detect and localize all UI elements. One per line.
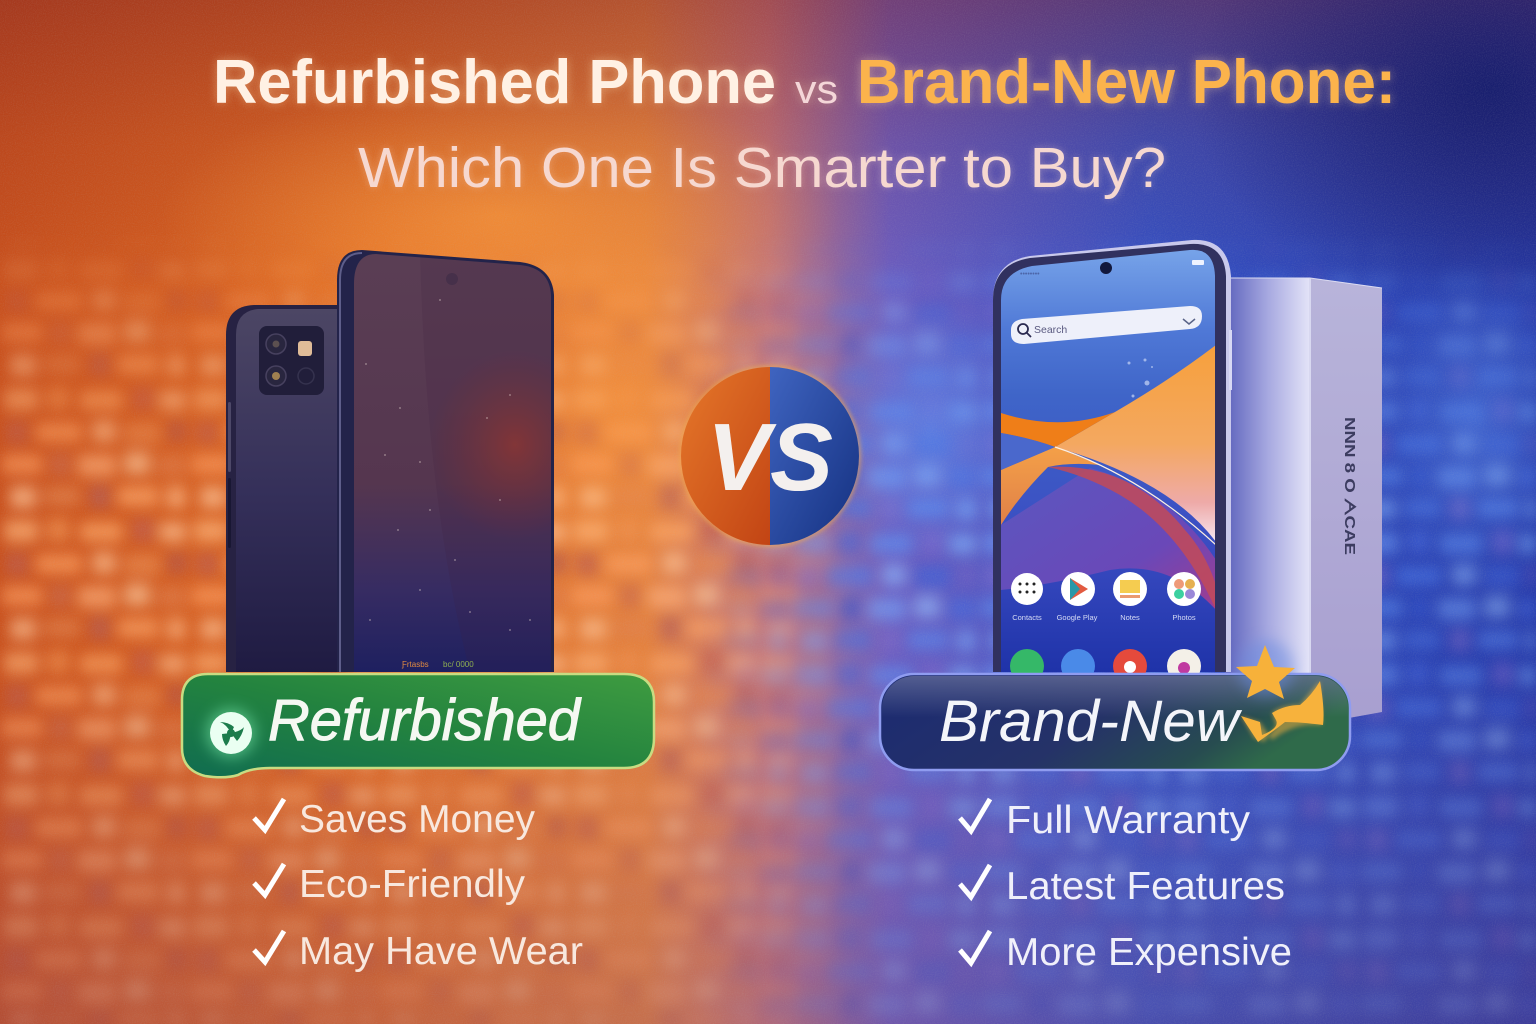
list: brand-new	[960, 799, 1292, 974]
item: May Have Wear	[299, 930, 583, 973]
refurbished phones	[226, 250, 554, 672]
camera module	[259, 326, 324, 395]
title	[213, 48, 1396, 117]
phone back with camera	[226, 305, 345, 672]
app icons: Notes	[1120, 613, 1140, 622]
status bar	[1020, 260, 1204, 274]
search bar: Search	[1034, 324, 1067, 336]
VS badge: VS	[707, 404, 833, 511]
item: Latest Features	[1006, 865, 1285, 908]
icon: star	[1236, 640, 1295, 699]
label: Brand-New	[880, 640, 1350, 770]
wallpaper left orange	[1001, 447, 1100, 525]
status bar: ••••••••	[1020, 271, 1040, 278]
new phone	[993, 240, 1232, 683]
label: Refurbished: Refurbished	[268, 688, 582, 753]
item: Full Warranty	[1006, 799, 1251, 842]
subtitle: Which One Is Smarter to Buy?	[358, 136, 1166, 200]
item: Eco-Friendly	[299, 863, 526, 906]
label: Brand-New: Brand-New	[939, 689, 1242, 754]
phone screen	[1000, 245, 1216, 675]
wallpaper purple wave	[1001, 468, 1216, 610]
label: Refurbished	[182, 674, 654, 777]
app icons	[1010, 572, 1201, 683]
phone front with dark screen	[337, 250, 554, 672]
title: Brand-New Phone:	[857, 48, 1396, 117]
app icons: Contacts	[1012, 613, 1042, 622]
item: More Expensive	[1006, 931, 1292, 974]
new box	[1225, 278, 1382, 725]
title: Refurbished Phone	[213, 48, 776, 117]
phone front with dark screen: bc/ 0000	[443, 660, 474, 669]
search bar	[1011, 306, 1202, 344]
wallpaper right orange	[1055, 345, 1216, 542]
wallpaper top-left orange	[1001, 412, 1115, 447]
icon: golden ribbon	[1241, 681, 1324, 742]
wallpaper red band	[1048, 467, 1216, 610]
app icons: Photos	[1172, 613, 1196, 622]
VS badge	[679, 365, 861, 547]
icon: recycle	[206, 708, 256, 758]
app icons: Google Play	[1057, 613, 1098, 622]
box label: NNN 8 O ᗅCAE	[1341, 417, 1358, 555]
title: vs	[795, 68, 838, 112]
small screen text: Ƒrtasbs	[401, 660, 429, 669]
list: refurbished	[254, 798, 583, 973]
item: Saves Money	[299, 798, 535, 841]
